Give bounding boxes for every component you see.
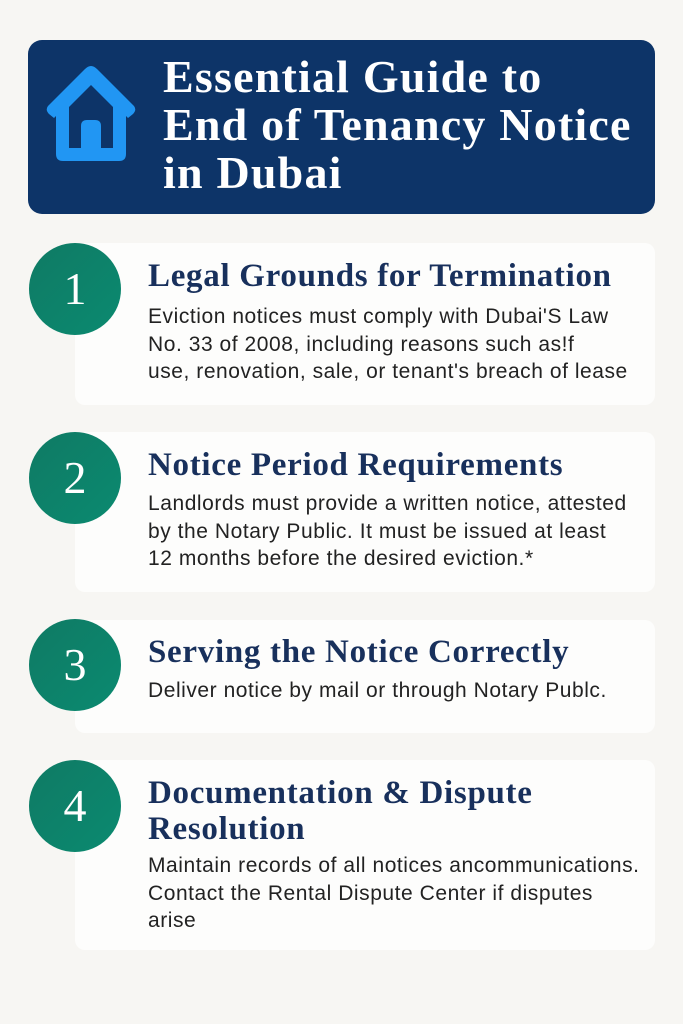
title	[163, 51, 632, 198]
badge 2	[29, 432, 121, 524]
badge 1: 1	[64, 263, 86, 314]
text 1: No. 33 of 2008, including reasons such as!f	[148, 332, 574, 356]
card 1	[75, 243, 655, 405]
text 4: arise	[148, 909, 196, 932]
title: End of Tenancy Notice	[163, 99, 632, 150]
text 1	[148, 305, 628, 383]
title: in Dubai	[163, 147, 343, 198]
heading 4: Resolution	[148, 811, 305, 847]
heading 4: Documentation & Dispute	[148, 775, 533, 811]
icon: house	[46, 66, 136, 161]
badge 2: 2	[64, 452, 86, 503]
text 2: by the Notary Public. It must be issued at least	[148, 520, 606, 542]
badge 4: 4	[64, 780, 86, 831]
badge 4	[29, 760, 121, 852]
text 3: Deliver notice by mail or through Notary Publc.	[148, 679, 607, 702]
text 2	[148, 492, 627, 570]
heading 4	[148, 775, 533, 847]
text 1: use, renovation, sale, or tenant's breach of lease	[148, 360, 628, 383]
card 3	[75, 620, 655, 733]
text 4	[148, 854, 640, 932]
text 4: Maintain records of all notices ancommunications.	[148, 854, 640, 877]
text 1: Eviction notices must comply with Dubai'S Law	[148, 305, 609, 328]
card 2	[75, 432, 655, 592]
badge 1	[29, 243, 121, 335]
heading 3: Serving the Notice Correctly	[148, 634, 569, 670]
badge 3	[29, 619, 121, 711]
header banner	[28, 40, 655, 214]
text 2: Landlords must provide a written notice, attested	[148, 492, 627, 515]
heading 1: Legal Grounds for Termination	[148, 258, 612, 294]
title: Essential Guide to	[163, 51, 542, 102]
badge 3: 3	[64, 639, 86, 690]
text 2: 12 months before the desired eviction.*	[148, 547, 534, 570]
heading 2: Notice Period Requirements	[148, 447, 563, 483]
card 4	[75, 760, 655, 950]
text 4: Contact the Rental Dispute Center if disputes	[148, 882, 593, 904]
